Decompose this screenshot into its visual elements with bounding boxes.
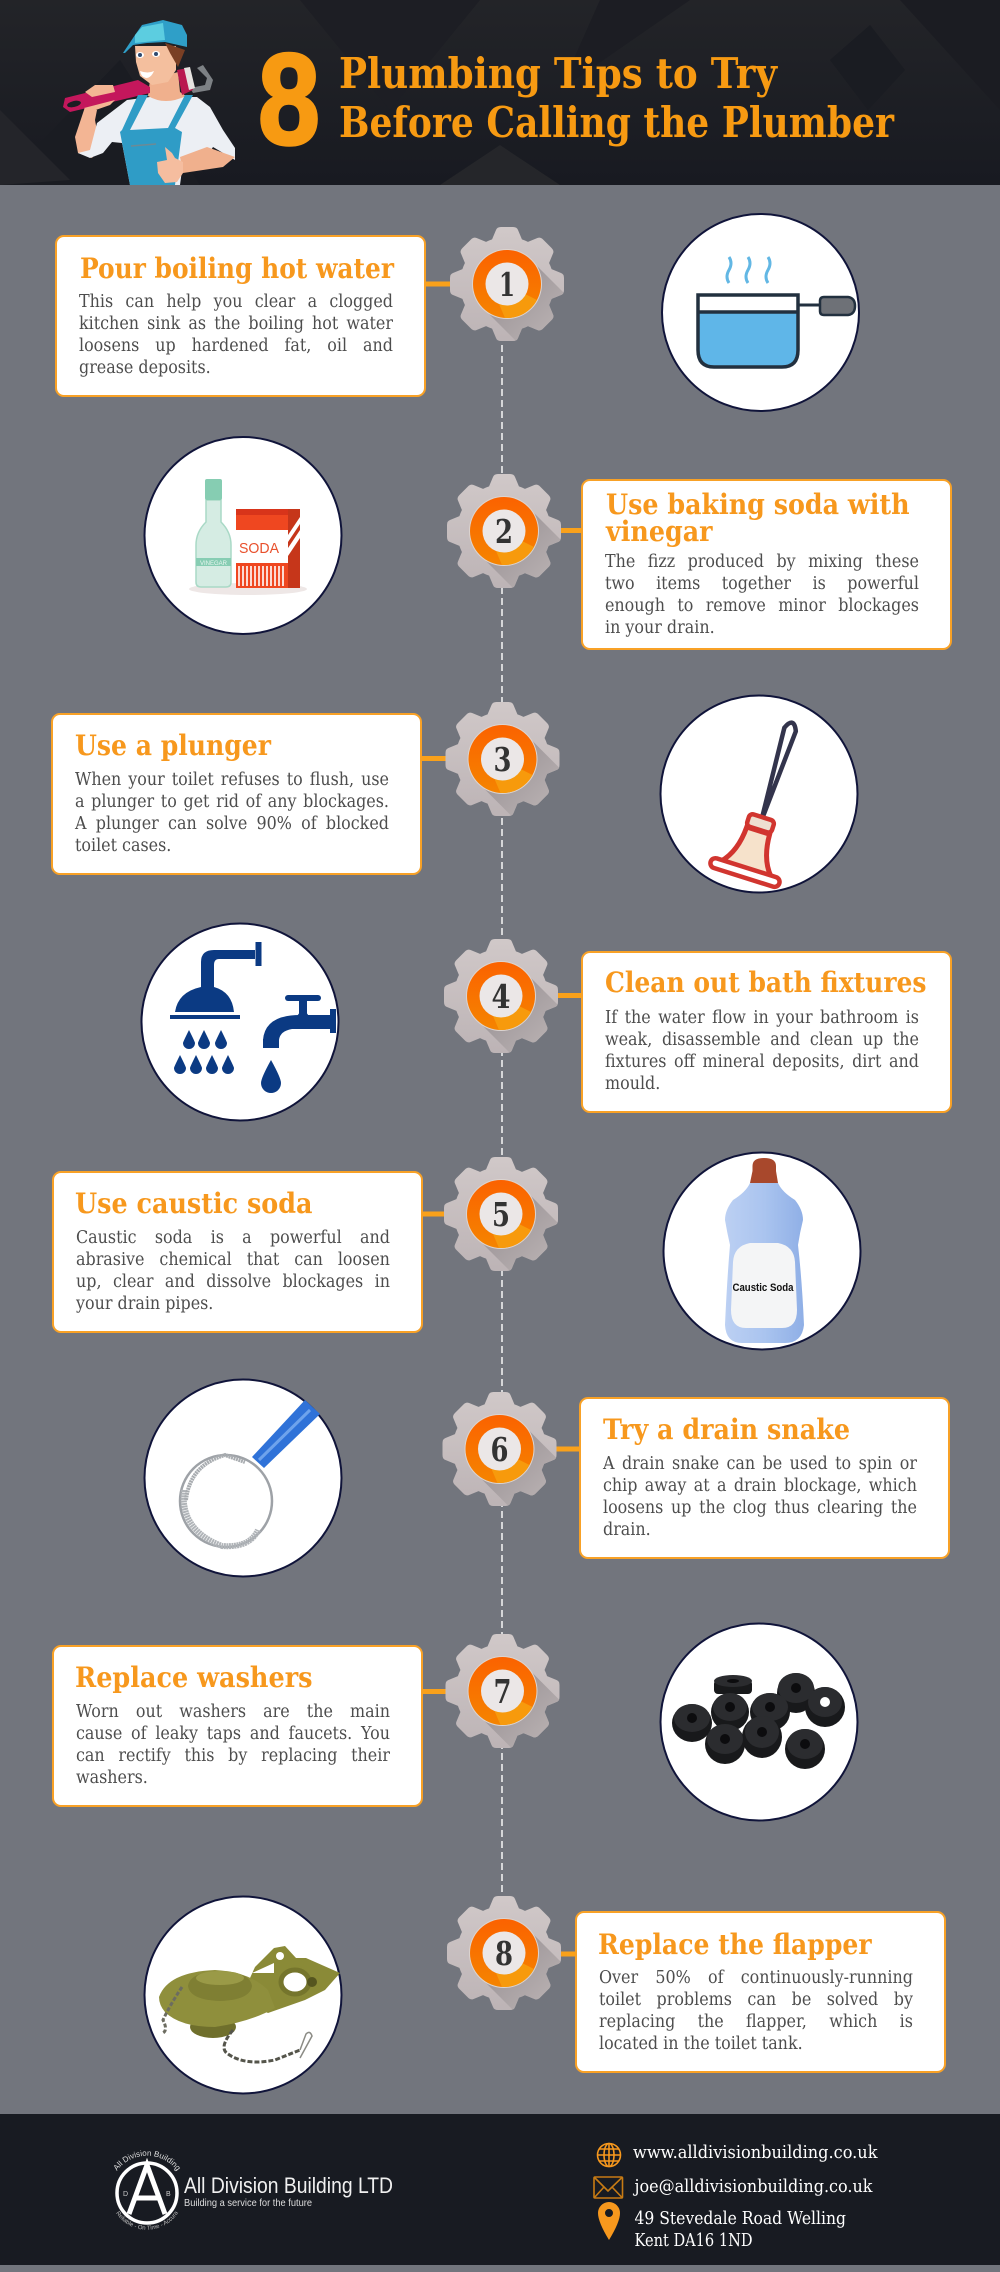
website: www.alldivisionbuilding.co.uk	[633, 2142, 878, 2163]
step gear 2	[444, 471, 568, 595]
connector 6	[552, 1446, 582, 1452]
step gear 7: 7	[494, 1672, 512, 1711]
text: tip 5: abrasive chemical that can loosen	[76, 1250, 390, 1270]
address	[634, 2208, 846, 2251]
text: tip 2: The fizz produced by mixing these	[605, 552, 919, 572]
left arm	[75, 107, 100, 158]
text: tip 7: cause of leaky taps and faucets. You	[76, 1724, 390, 1744]
text: tip 6	[602, 1454, 917, 1540]
text: tip 2: two items together is powerful	[605, 574, 919, 594]
overalls	[120, 95, 193, 185]
heading: tip 1: Pour boiling hot water	[80, 252, 395, 285]
step gear 5: 5	[492, 1195, 510, 1234]
big number 8: 8	[258, 26, 320, 172]
footer band	[0, 2114, 1000, 2265]
text: tip 3: When your toilet refuses to flush, use	[75, 770, 389, 790]
step gear 1	[447, 224, 571, 348]
icon: toilet flapper	[144, 1896, 342, 2094]
text: tip 7: can rectify this by replacing their	[76, 1746, 390, 1766]
footer logo	[114, 2150, 393, 2230]
text: tip 2	[605, 552, 919, 638]
text: tip 1: loosens up hardened fat, oil and	[79, 336, 393, 356]
header band	[0, 0, 1000, 185]
text: tip 1: grease deposits.	[79, 358, 211, 378]
footer logo: Reliable - On Time - Accurate	[116, 2211, 178, 2230]
text: tip 4: weak, disassemble and clean up the	[605, 1030, 919, 1050]
address: 49 Stevedale Road Welling	[634, 2208, 846, 2229]
step gear 4	[441, 936, 565, 1060]
step gear 7	[442, 1631, 566, 1755]
connector 5	[421, 1212, 451, 1216]
face	[135, 46, 176, 85]
text: tip 1: This can help you clear a clogged	[79, 292, 393, 312]
connector 3	[421, 756, 451, 761]
text: tip 3: toilet cases.	[75, 836, 171, 856]
hand on wrench	[84, 85, 115, 112]
text: tip 8: replacing the flapper, which is	[599, 2012, 913, 2032]
connector 1	[424, 282, 454, 286]
connector 2	[556, 528, 584, 533]
connector 7	[421, 1689, 451, 1694]
panel: tip 3	[51, 713, 422, 875]
panel: tip 8	[575, 1911, 946, 2073]
footer logo: All Division Building	[114, 2150, 180, 2172]
panel: tip 7	[52, 1645, 422, 1807]
icon: vinegar and baking soda: SODA	[239, 540, 279, 557]
text: tip 5	[76, 1228, 390, 1314]
text: tip 6: loosens up the clog thus clearing the	[603, 1498, 917, 1518]
text: tip 3: a plunger to get rid of any blockages.	[75, 792, 389, 812]
text: tip 6: drain.	[603, 1520, 651, 1540]
heading: tip 2	[605, 488, 910, 548]
text: tip 8: located in the toilet tank.	[599, 2034, 803, 2054]
footer logo: D	[123, 2191, 128, 2198]
text: tip 4: mould.	[605, 1074, 660, 1094]
title: Plumbing Tips to Try	[339, 49, 778, 98]
step gear 1: 1	[499, 265, 515, 304]
icon: globe	[598, 2144, 620, 2166]
text: tip 8	[599, 1968, 913, 2054]
step gear 2: 2	[495, 512, 513, 551]
heading: tip 5: Use caustic soda	[75, 1187, 312, 1220]
footer logo: B	[166, 2191, 171, 2198]
text: tip 2: in your drain.	[605, 618, 715, 638]
right forearm	[180, 147, 235, 173]
icon: location pin	[598, 2202, 620, 2240]
heading: tip 2: vinegar	[605, 515, 714, 548]
step gear 5	[441, 1154, 565, 1278]
text: tip 8: toilet problems can be solved by	[599, 1990, 913, 2010]
text: tip 5: your drain pipes.	[76, 1294, 213, 1314]
text: tip 3	[74, 770, 389, 856]
icon: shower and tap	[142, 924, 338, 1120]
text: tip 2: enough to remove minor blockages	[605, 596, 919, 616]
connector 8	[555, 1952, 577, 1956]
panel: tip 2	[581, 479, 952, 650]
wrench head	[177, 68, 193, 95]
footer logo: All Division Building LTD	[184, 2173, 393, 2198]
timeline dashed line	[501, 345, 503, 1905]
heading: tip 4: Clean out bath fixtures	[605, 966, 926, 999]
neck	[148, 72, 186, 101]
address: Kent DA16 1ND	[634, 2230, 752, 2251]
panel: tip 1	[55, 235, 426, 397]
step gear 6	[440, 1389, 564, 1513]
heading: tip 8: Replace the flapper	[598, 1928, 873, 1961]
text: tip 7: Worn out washers are the main	[76, 1702, 390, 1722]
step gear 6: 6	[490, 1430, 508, 1469]
text: tip 6: chip away at a drain blockage, which	[603, 1476, 917, 1496]
text: tip 7	[76, 1702, 390, 1788]
icon: vinegar and baking soda: VINEGAR	[200, 561, 228, 567]
heading: tip 2: Use baking soda with	[606, 488, 910, 521]
panel: tip 5	[52, 1171, 422, 1333]
thumbs up hand	[157, 147, 183, 183]
title: Before Calling the Plumber	[339, 98, 895, 147]
heading: tip 6: Try a drain snake	[603, 1413, 850, 1446]
illustration: plumber with wrench	[63, 20, 235, 185]
shirt	[78, 97, 235, 185]
text: tip 1	[79, 292, 393, 378]
panel: tip 6	[579, 1397, 950, 1559]
text: tip 4: If the water flow in your bathroom is	[605, 1008, 919, 1028]
icon: boiling pot	[662, 214, 859, 411]
icon: drain snake	[144, 1380, 342, 1576]
heading: tip 3: Use a plunger	[75, 729, 272, 762]
icon: caustic soda bottle: Caustic Soda	[732, 1282, 794, 1294]
icon: plunger	[660, 696, 858, 892]
email: joe@alldivisionbuilding.co.uk	[633, 2176, 873, 2197]
icon: caustic soda bottle	[664, 1152, 860, 1350]
text: tip 4	[605, 1008, 919, 1094]
panel: tip 4	[581, 951, 952, 1113]
text: tip 6: A drain snake can be used to spin or	[603, 1454, 917, 1474]
text: tip 5: up, clear and dissolve blockages in	[76, 1272, 390, 1292]
text: tip 3: A plunger can solve 90% of blocked	[75, 814, 389, 834]
step gear 8	[444, 1893, 568, 2017]
connector 4	[554, 993, 584, 998]
icon: envelope	[594, 2177, 622, 2198]
wrench handle	[63, 80, 150, 112]
step gear 3	[442, 699, 566, 823]
icon: vinegar and baking soda	[144, 437, 342, 634]
icon: rubber washers	[660, 1624, 858, 1820]
footer logo: Building a service for the future	[184, 2198, 312, 2209]
step gear 8: 8	[495, 1934, 513, 1973]
text: tip 1: kitchen sink as the boiling hot water	[79, 314, 393, 334]
heading: tip 7: Replace washers	[75, 1661, 312, 1694]
step gear 3: 3	[494, 740, 512, 779]
wrench jaw	[190, 65, 213, 93]
cap	[123, 20, 187, 53]
step gear 4: 4	[492, 977, 510, 1016]
text: tip 4: fixtures off mineral deposits, dirt and	[605, 1052, 919, 1072]
text: tip 5: Caustic soda is a powerful and	[76, 1228, 390, 1248]
text: tip 8: Over 50% of continuously-running	[599, 1968, 913, 1988]
title	[339, 49, 895, 147]
text: tip 7: washers.	[76, 1768, 148, 1788]
